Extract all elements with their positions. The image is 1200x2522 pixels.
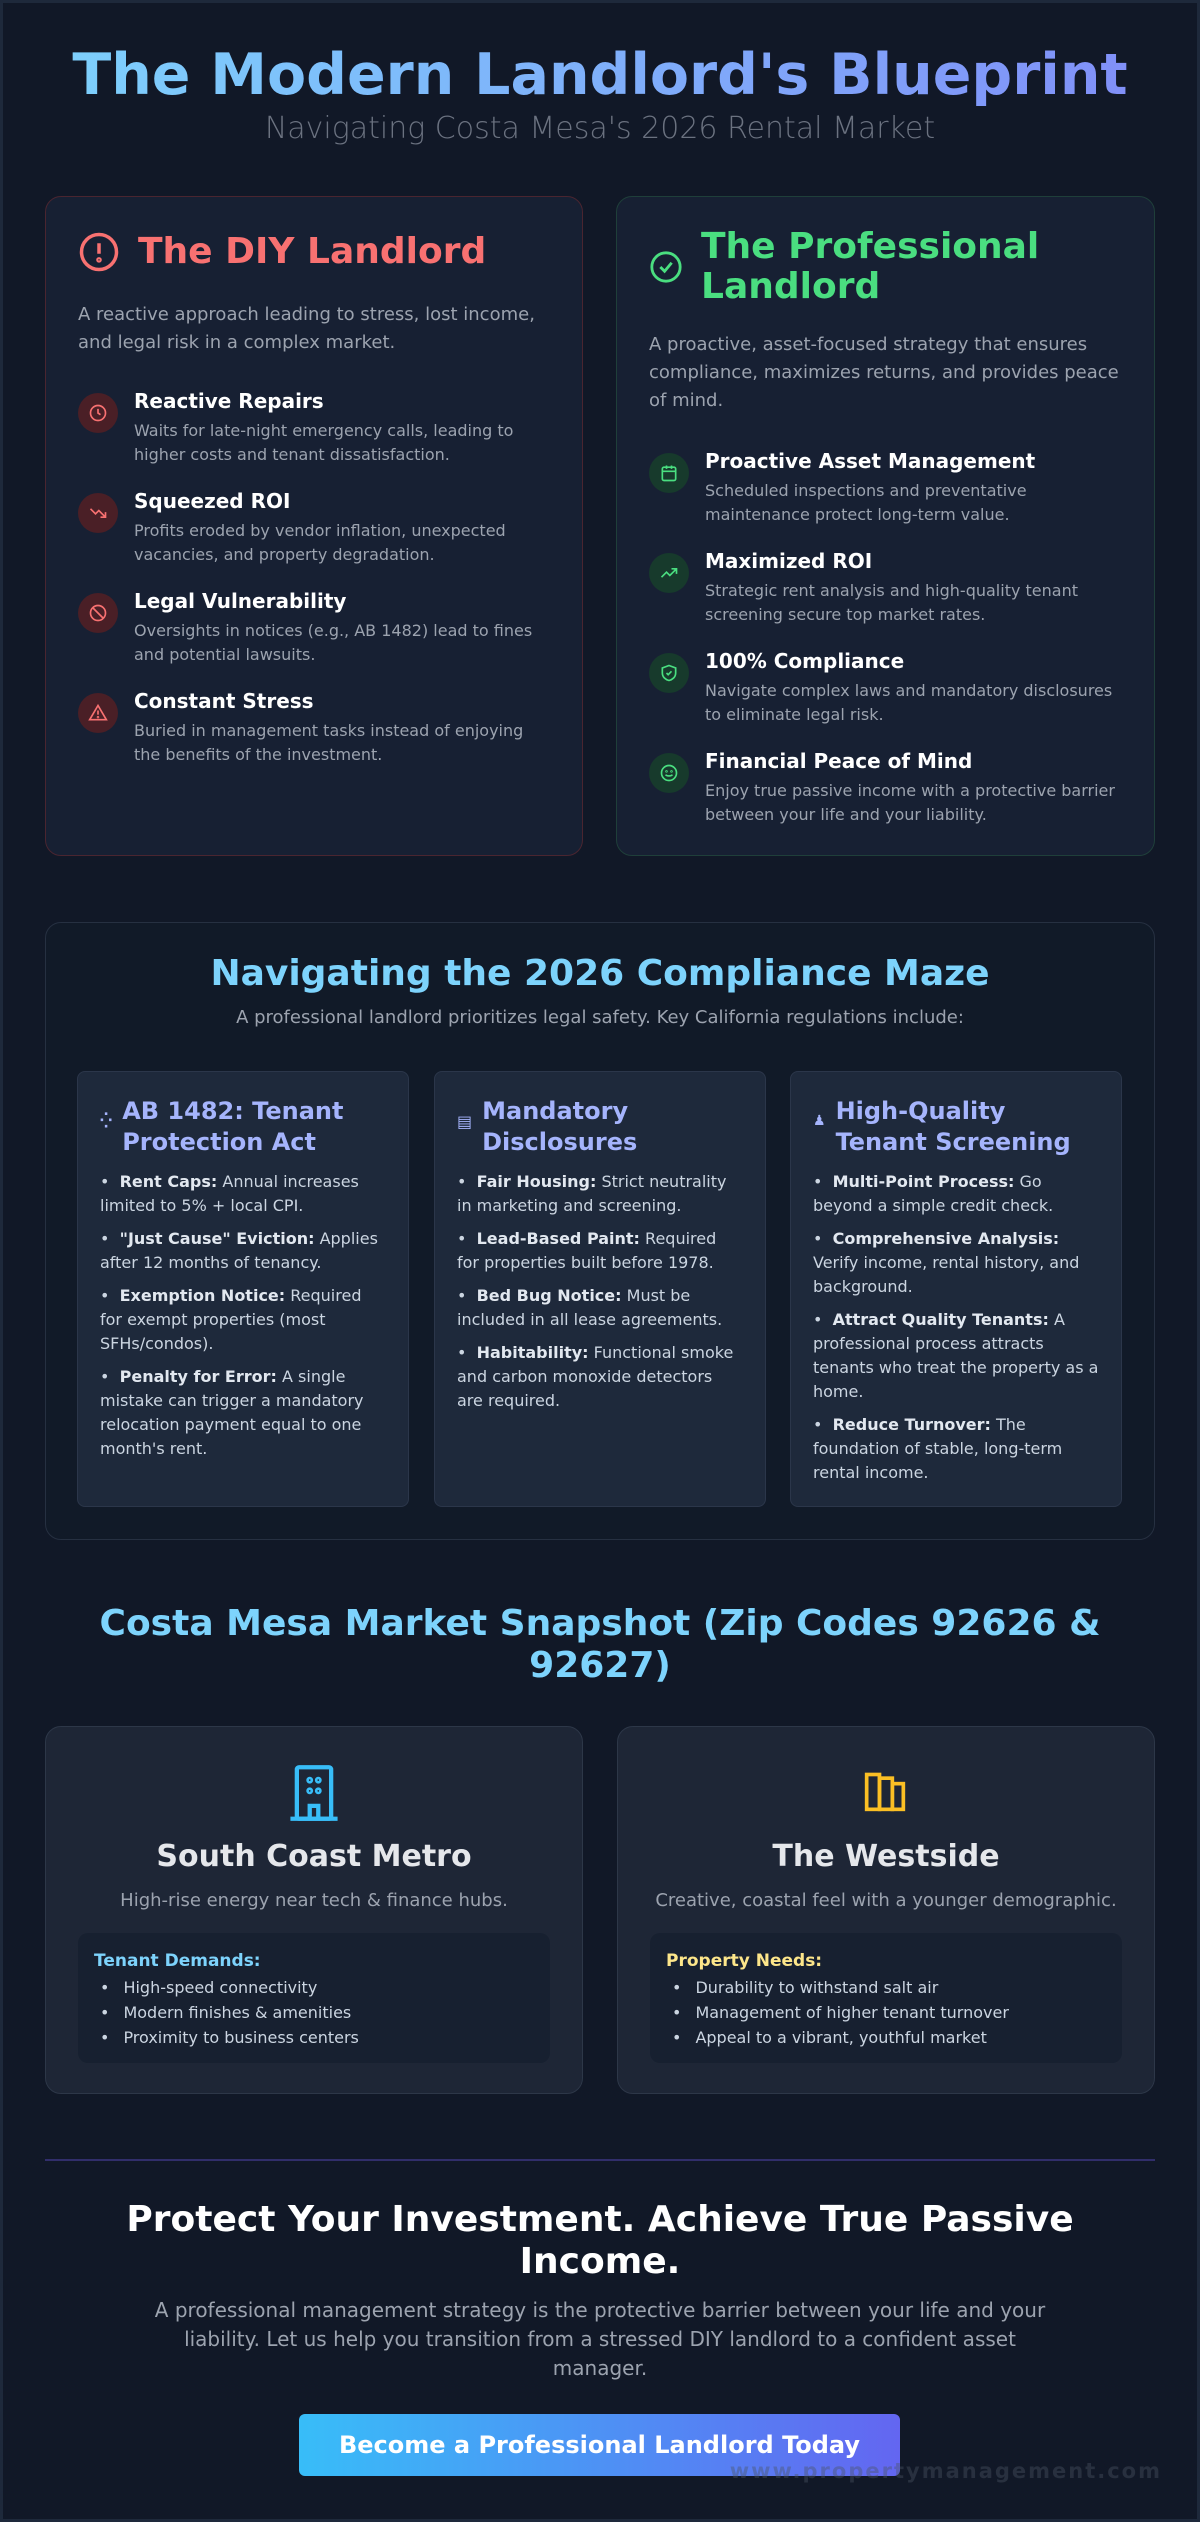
subpanel: screening: • Multi-Point Process: Go beyond a simple credit check. [813, 1172, 1053, 1215]
CTA button [299, 2414, 900, 2476]
item: proactive asset management: Proactive Asset Management [705, 449, 1035, 473]
tenant demands box: Tenant Demands: [94, 1951, 261, 1971]
item: compliance: 100% Compliance [705, 649, 904, 673]
tenant demands box [78, 1933, 550, 2063]
DIY description: A reactive approach leading to stress, lost income, and legal risk in a complex market. [78, 304, 535, 353]
pro description: A proactive, asset-focused strategy that ensures compliance, maximizes returns, and provides peace of mind. [649, 334, 1119, 411]
item: peace of mind: Financial Peace of Mind [705, 749, 972, 773]
item: peace of mind: Enjoy true passive income with a protective barrier between your life and your liability. [705, 781, 1115, 824]
item: maximized ROI: Maximized ROI [705, 549, 872, 573]
pro heading [650, 226, 1039, 307]
item: compliance: Navigate complex laws and mandatory disclosures to eliminate legal risk. [705, 681, 1112, 724]
item: peace of mind [649, 749, 1115, 824]
subpanel: disclosures: Mandatory Disclosures [482, 1097, 637, 1156]
item: constant stress: Constant Stress [134, 689, 314, 713]
item: reactive repairs [78, 389, 513, 464]
item: legal vulnerability [78, 589, 532, 664]
subpanel: screening: • Comprehensive Analysis: Verify income, rental history, and background. [813, 1229, 1079, 1296]
subpanel: AB 1482: • Rent Caps: Annual increases limited to 5% + local CPI. [100, 1172, 359, 1215]
market heading: Costa Mesa Market Snapshot (Zip Codes 92626 & 92627) [100, 1603, 1100, 1686]
panel: professional landlord [616, 196, 1155, 856]
item: maximized ROI [649, 549, 1078, 624]
CTA heading: Protect Your Investment. Achieve True Passive Income. [126, 2199, 1074, 2282]
item: legal vulnerability: Legal Vulnerability [134, 589, 346, 613]
subpanel: screening: • Attract Quality Tenants: A professional process attracts tenants who treat the property as a home. [813, 1310, 1098, 1401]
tenant demands box: Modern finishes & amenities [123, 2003, 351, 2022]
item: proactive asset management: Scheduled inspections and preventative maintenance protect long-term value. [705, 481, 1027, 524]
item: squeezed ROI: Squeezed ROI [134, 489, 290, 513]
compliance heading: Navigating the 2026 Compliance Maze [210, 953, 990, 994]
CTA paragraph: A professional management strategy is the protective barrier between your life and your liability. Let us help you transition from a stressed DIY landlord to a confident asset manager. [155, 2298, 1045, 2380]
item: reactive repairs: Waits for late-night emergency calls, leading to higher costs and tenant dissatisfaction. [134, 421, 513, 464]
subpanel: screening: ♟ [813, 1113, 826, 1129]
property needs box: Management of higher tenant turnover [695, 2003, 1009, 2022]
DIY heading: The DIY Landlord [138, 231, 486, 272]
subpanel: screening: High-Quality Tenant Screening [836, 1097, 1071, 1156]
item: constant stress: Buried in management tasks instead of enjoying the benefits of the investment. [134, 721, 523, 764]
title: The Modern Landlord's Blueprint [72, 42, 1128, 108]
tenant demands box: High-speed connectivity [123, 1978, 317, 1997]
subpanel: AB 1482: • Exemption Notice: Required for exempt properties (most SFHs/condos). [100, 1286, 361, 1353]
property needs box [650, 1933, 1122, 2063]
subpanel: screening [790, 1071, 1122, 1507]
panel: South Coast Metro: High-rise energy near tech & finance hubs. [120, 1890, 508, 1911]
subpanel: AB 1482: ⁛ [100, 1113, 112, 1129]
subpanel: disclosures [434, 1071, 766, 1507]
panel: South Coast Metro: South Coast Metro [156, 1839, 472, 1874]
item: constant stress [78, 689, 523, 764]
pro heading: The Professional [701, 226, 1039, 267]
subpanel: disclosures: • Fair Housing: Strict neutrality in marketing and screening. [457, 1172, 726, 1215]
CTA button: Become a Professional Landlord Today [339, 2431, 860, 2459]
subpanel: AB 1482: • Penalty for Error: A single mistake can trigger a mandatory relocation payment equal to one month's rent. [100, 1367, 364, 1458]
item: compliance [649, 649, 1112, 724]
panel: compliance maze [45, 922, 1155, 1540]
subpanel: screening: • Reduce Turnover: The foundation of stable, long-term rental income. [813, 1415, 1062, 1482]
property needs box: Durability to withstand salt air [695, 1978, 938, 1997]
panel: DIY landlord [45, 196, 583, 856]
property needs box: Property Needs: [666, 1951, 822, 1971]
subpanel: disclosures: • Habitability: Functional smoke and carbon monoxide detectors are required. [457, 1343, 733, 1410]
icon: building [290, 1765, 338, 1821]
property needs box: Appeal to a vibrant, youthful market [695, 2028, 987, 2047]
item: squeezed ROI [78, 489, 506, 564]
subpanel: disclosures: ▤ [457, 1112, 472, 1131]
subpanel: disclosures: • Lead-Based Paint: Required for properties built before 1978. [457, 1229, 716, 1272]
subpanel: disclosures: • Bed Bug Notice: Must be included in all lease agreements. [457, 1286, 722, 1329]
subpanel: AB 1482: AB 1482: Tenant Protection Act [122, 1097, 343, 1156]
tenant demands box: Proximity to business centers [123, 2028, 359, 2047]
compliance intro: A professional landlord prioritizes legal safety. Key California regulations include: [236, 1007, 964, 1028]
subpanel: AB 1482 [77, 1071, 409, 1507]
pro heading: Landlord [701, 266, 880, 307]
panel: Westside [617, 1726, 1155, 2094]
item: proactive asset management [649, 449, 1035, 524]
item: squeezed ROI: Profits eroded by vendor inflation, unexpected vacancies, and property degradation. [134, 521, 506, 564]
watermark: www.propertymanagement.com [730, 2459, 1162, 2483]
subpanel: AB 1482: • "Just Cause" Eviction: Applies after 12 months of tenancy. [100, 1229, 378, 1272]
panel: Westside: The Westside [772, 1839, 1000, 1874]
subtitle: Navigating Costa Mesa's 2026 Rental Market [265, 111, 935, 146]
item: reactive repairs: Reactive Repairs [134, 389, 324, 413]
item: maximized ROI: Strategic rent analysis and high-quality tenant screening secure top market rates. [705, 581, 1078, 624]
panel: Westside: Creative, coastal feel with a younger demographic. [655, 1890, 1117, 1911]
panel: South Coast Metro [45, 1726, 583, 2094]
item: legal vulnerability: Oversights in notices (e.g., AB 1482) lead to fines and potential lawsuits. [134, 621, 532, 664]
icon: buildings [864, 1772, 906, 1812]
